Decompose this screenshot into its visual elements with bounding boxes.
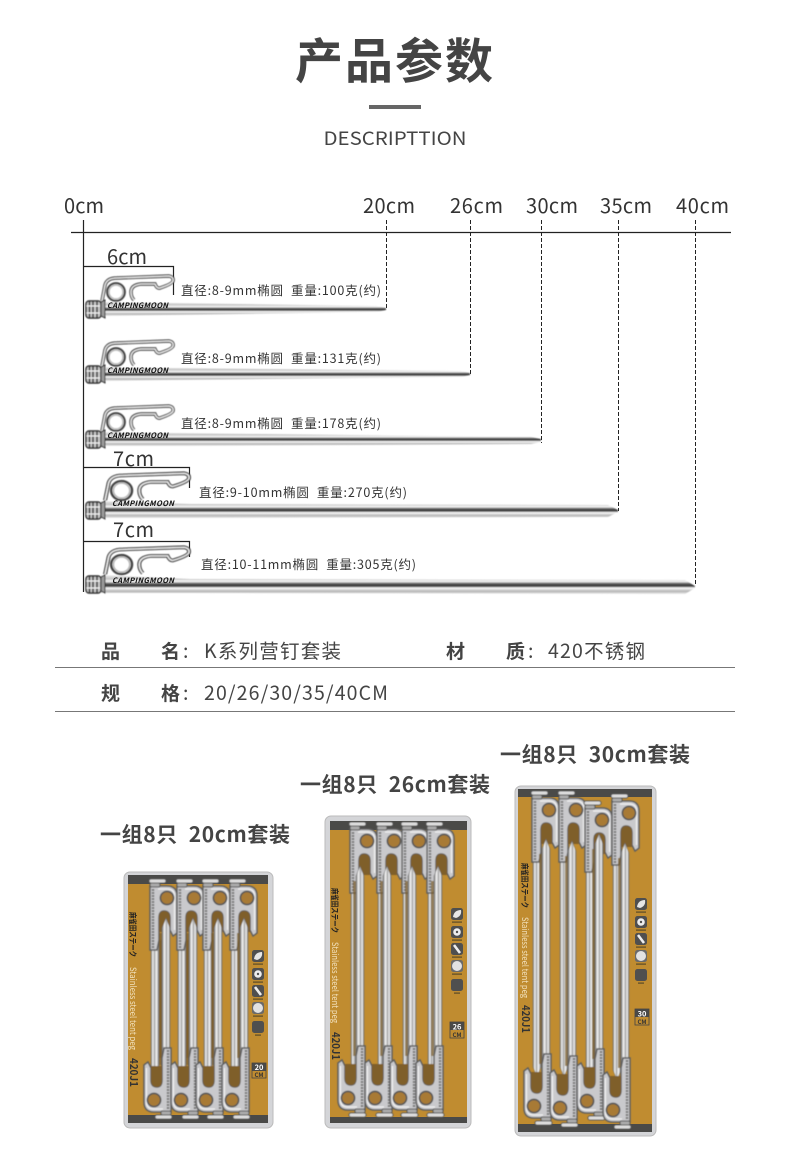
size badge: CM [452,1030,462,1039]
package text: 420J1 [126,1058,141,1087]
package text: 麻雀田ステーク [127,912,138,957]
package text [126,912,141,1087]
package text: 麻雀田ステーク [329,888,340,933]
size badge: 20 [255,1062,264,1073]
subtitle: DESCRIPTTION [324,125,466,151]
spec labels [181,280,416,573]
peg 30cm: CAMPINGMOON [107,430,169,441]
head width brackets [83,266,190,557]
package: 20cm [124,872,273,1128]
size badge: 26 [453,1022,462,1032]
head width labels: 7cm [113,443,154,472]
size chart [64,190,731,594]
ruler labels: 0cm [64,190,104,219]
feature icons [635,898,647,984]
title accent bar [369,105,421,109]
pegs [524,791,639,1129]
package text [518,863,533,1033]
size badge [252,1062,266,1079]
feature icons [451,908,463,994]
package text: Stainless steel tent peg [519,917,531,998]
size badge: CM [254,1070,264,1079]
product info table [55,635,735,712]
ruler labels: 40cm [676,190,729,219]
row: name and material: 名 [161,637,180,664]
title: 产品参数 [295,22,495,92]
row: name and material [101,635,645,664]
package: 26cm [325,816,471,1128]
peg 20cm [86,276,386,318]
ruler labels: 35cm [600,190,652,219]
peg 35cm [86,473,618,519]
peg 35cm: CAMPINGMOON [112,498,175,509]
ruler labels: 26cm [450,190,503,219]
package text [328,888,343,1060]
peg 40cm [86,547,695,594]
spec labels: 直径:8-9mm椭圆 重量:131克(约) [181,348,381,367]
row: name and material: 质 [506,637,525,664]
package text: Stainless steel tent peg [127,967,139,1050]
size badge: 30 [638,1008,647,1020]
head width labels: 7cm [113,514,154,543]
row: sizes: 规 [101,679,120,706]
row: sizes [101,677,388,706]
row: name and material: : [528,635,533,664]
package text: Stainless steel tent peg [329,942,341,1023]
package text: 麻雀田ステーク [519,863,530,908]
peg 26cm [86,341,470,383]
spec labels: 直径:8-9mm椭圆 重量:100克(约) [181,280,381,299]
peg 26cm: CAMPINGMOON [107,365,169,376]
row: name and material: : [183,635,188,664]
row: sizes: 格 [161,679,180,706]
spec labels: 直径:8-9mm椭圆 重量:178克(约) [181,413,381,432]
caption: 20cm set: 一组8只 20cm套装 [100,819,290,849]
peg 30cm [86,406,541,448]
ruler labels: 30cm [526,190,578,219]
peg 40cm: CAMPINGMOON [112,575,175,586]
spec labels: 直径:10-11mm椭圆 重量:305克(约) [201,554,416,573]
size badge: CM [637,1017,647,1026]
caption: 30cm set: 一组8只 30cm套装 [500,739,690,769]
ruler labels [64,190,729,219]
spec labels: 直径:9-10mm椭圆 重量:270克(约) [199,482,407,501]
row: name and material: 品 [101,637,120,664]
head width labels [107,241,154,543]
caption: 26cm set: 一组8只 26cm套装 [300,769,490,799]
row: sizes: 20/26/30/35/40CM [204,677,388,706]
row: name and material: K系列营钉套装 [204,635,341,664]
ruler axis [71,220,731,592]
pegs [338,822,454,1117]
size badge [635,1008,649,1026]
row: name and material: 420不锈钢 [548,635,645,664]
row: sizes: : [183,677,188,706]
package: 30cm [515,786,656,1136]
size badge [450,1022,464,1039]
feature icons [252,950,264,1036]
row: name and material: 材 [446,637,465,664]
package text: 420J1 [518,1005,533,1033]
package text: 420J1 [328,1032,343,1060]
pegs [144,879,257,1119]
ruler labels: 20cm [363,190,415,219]
peg 20cm: CAMPINGMOON [107,300,169,311]
head width labels: 6cm [107,241,147,270]
